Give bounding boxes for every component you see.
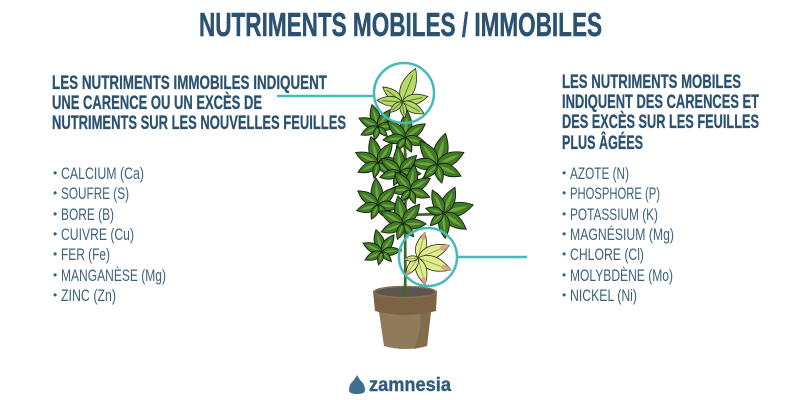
plant leaves [349,100,480,269]
plant pot [373,286,437,349]
list: immobile nutrients: MANGANÈSE (Mg) [61,266,166,285]
list: immobile nutrients: FER (Fe) [61,245,110,264]
list: mobile nutrients: POTASSIUM (K) [570,205,658,224]
list: immobile nutrients: • [53,227,57,241]
list: mobile nutrients: PHOSPHORE (P) [570,184,660,203]
list: mobile nutrients: • [562,186,566,200]
list: immobile nutrients: • [53,166,57,180]
list: mobile nutrients: MOLYBDÈNE (Mo) [570,266,673,285]
list: mobile nutrients: • [562,268,566,282]
list: immobile nutrients: • [53,186,57,200]
heading: immobile nutrients: UNE CARENCE OU UN EXCÈS DE [52,91,262,114]
list: mobile nutrients: • [562,247,566,261]
heading: mobile nutrients: PLUS ÂGÉES [562,130,643,154]
list: immobile nutrients [53,164,166,305]
list: mobile nutrients: • [562,227,566,241]
list: immobile nutrients: BORE (B) [61,205,114,224]
list: mobile nutrients: MAGNÉSIUM (Mg) [570,225,674,244]
logo: zamnesia: zamnesia [369,375,451,396]
icon: logo mark [349,375,365,394]
list: immobile nutrients: • [53,247,57,261]
list: immobile nutrients: • [53,207,57,221]
list: mobile nutrients: • [562,207,566,221]
callout: top circle and line [277,63,434,123]
list: immobile nutrients: ZINC (Zn) [61,286,116,305]
list: immobile nutrients: SOUFRE (S) [61,184,129,203]
title: NUTRIMENTS MOBILES / IMMOBILES [199,6,602,43]
list: mobile nutrients: • [562,288,566,302]
list: immobile nutrients: CUIVRE (Cu) [61,225,134,244]
leaf: pale new leaf [377,66,429,119]
plant stem [384,118,442,296]
list: mobile nutrients: • [562,166,566,180]
heading: mobile nutrients [562,71,759,154]
heading: immobile nutrients: NUTRIMENTS SUR LES NOUVELLES FEUILLES [52,112,346,134]
leaf: damaged old leaf [402,231,453,286]
list: immobile nutrients: • [53,288,57,302]
heading: immobile nutrients: LES NUTRIMENTS IMMOBILES INDIQUENT [52,72,327,94]
list: mobile nutrients: NICKEL (Ni) [570,286,637,305]
list: mobile nutrients: CHLORE (Cl) [570,245,644,264]
list: mobile nutrients [562,164,674,305]
list: immobile nutrients: • [53,268,57,282]
list: immobile nutrients: CALCIUM (Ca) [61,164,144,183]
list: mobile nutrients: AZOTE (N) [570,164,629,183]
callout: bottom circle and line [399,228,527,286]
heading: immobile nutrients [52,72,346,134]
